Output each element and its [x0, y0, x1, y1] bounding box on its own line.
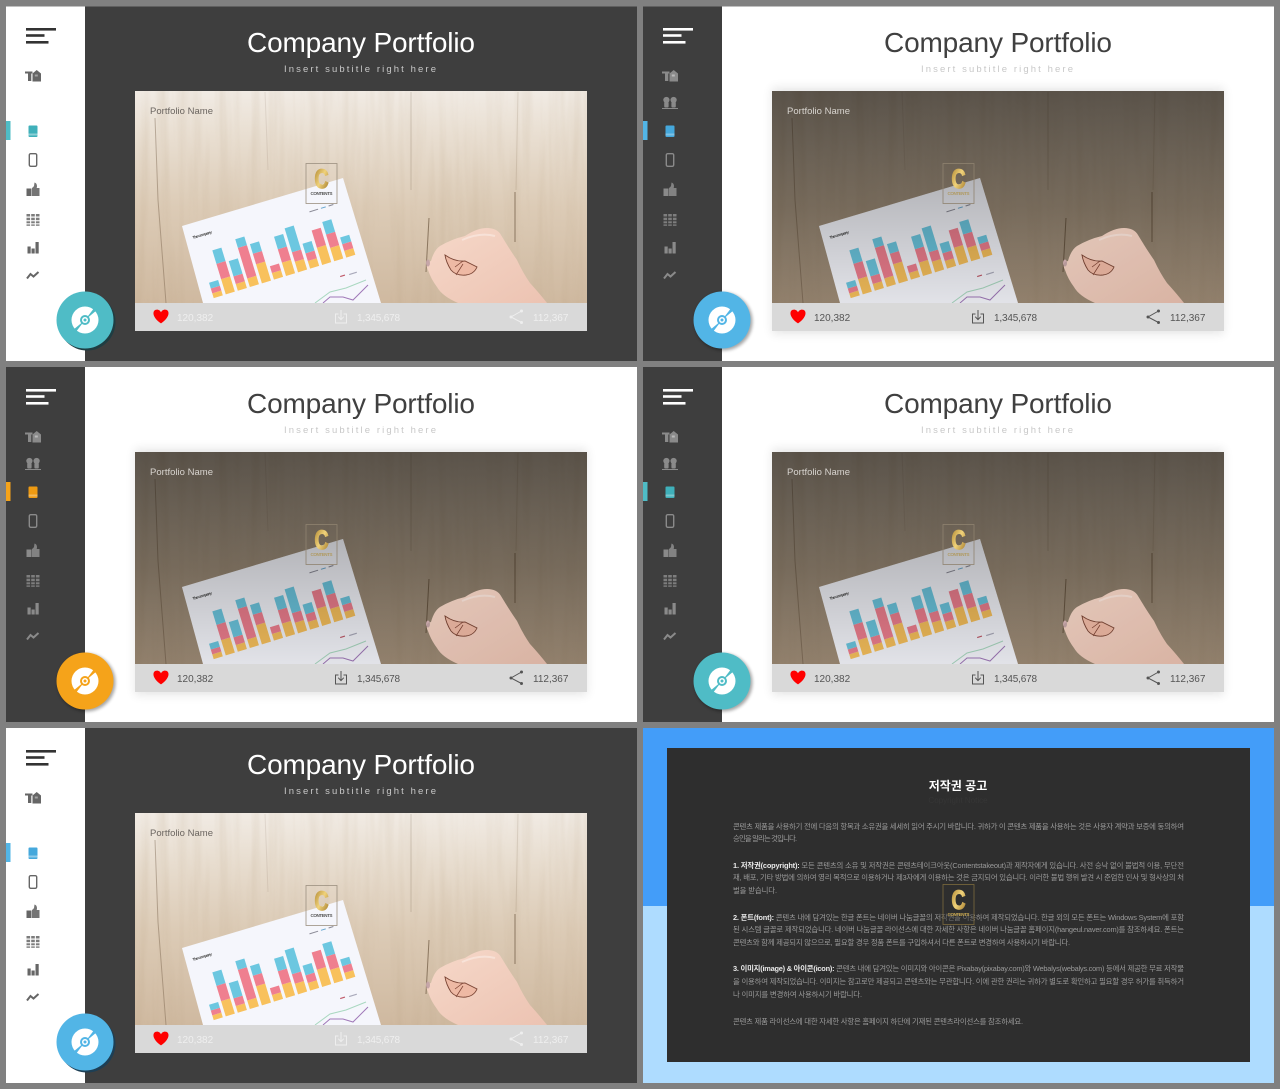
paragraph 1: copyright: 재, 배포, 기타 방법에 의하여 영리 목적으로 이용하거나 제3자에게 이용하는 것은 금지되어 있습니다. 이러한 불법 행위 발견 시 준엄한 민사 및 형사상의 처 — [733, 873, 1184, 882]
downloads stat: 1,345,678 — [994, 674, 1037, 685]
paragraph 2: font: 2. 폰트(font): 콘텐츠 내에 담겨있는 한글 폰트는 네이버 나눔글꼴의 저작권을 이용하여 제작되었습니다. 한글 외의 모든 폰트는 Windows System에 포함 — [733, 913, 1184, 922]
downloads stat — [972, 310, 1037, 324]
watermark logo: C — [314, 525, 329, 555]
subtitle: Insert subtitle right here — [284, 786, 436, 797]
panel: white main area — [722, 6, 1274, 361]
sidebar navigation icons — [25, 70, 41, 278]
active tab marker — [6, 121, 10, 140]
shares stat: 112,367 — [533, 1035, 569, 1046]
shares stat — [1147, 671, 1206, 685]
downloads stat: 1,345,678 — [357, 674, 400, 685]
title: Company Portfolio — [247, 388, 475, 419]
stats bar — [135, 1025, 587, 1053]
panel: white main area — [85, 367, 637, 722]
slide 1: dark main panel, teal accent — [6, 6, 637, 361]
slide 3: dark sidebar, white main, orange accent — [6, 367, 637, 722]
icon: disc button — [56, 1014, 116, 1072]
title: Company Portfolio — [884, 27, 1112, 58]
subtitle: Insert subtitle right here — [921, 64, 1073, 75]
downloads stat — [336, 671, 400, 685]
watermark logo: C — [314, 164, 329, 194]
photo shadow — [135, 449, 587, 695]
likes stat — [153, 1032, 214, 1046]
icon: disc button — [694, 292, 752, 350]
photo shadow — [772, 449, 1224, 695]
icon: book active — [28, 486, 38, 498]
icon: book active — [28, 126, 38, 137]
subheading: Copyright Notice — [928, 796, 988, 805]
downloads stat — [336, 310, 400, 324]
sidebar navigation icons — [25, 431, 41, 640]
watermark logo: C — [951, 885, 966, 915]
paragraph 1: copyright: 벌을 받습니다. — [733, 886, 777, 895]
subtitle: Insert subtitle right here — [921, 425, 1073, 436]
closing paragraph: 콘텐츠 제품 라이선스에 대한 자세한 사항은 홈페이지 하단에 기재된 콘텐츠라이선스를 참조하세요. — [733, 1017, 1023, 1026]
photo: dimmed wood desk, chart paper and fist — [772, 452, 1224, 664]
active tab marker — [6, 482, 10, 501]
icon: hamburger menu — [663, 28, 693, 44]
likes stat: 120,382 — [177, 1035, 214, 1046]
photo: wood desk, chart paper and fist — [135, 813, 587, 1025]
panel: dark sidebar — [643, 6, 722, 361]
active tab marker — [643, 121, 648, 140]
watermark logo: CONTENTS — [310, 191, 332, 196]
paragraph 1: copyright — [733, 861, 1184, 895]
watermark logo: CONTENTS — [948, 191, 970, 196]
stats bar — [135, 664, 587, 692]
panel: white sidebar — [6, 728, 85, 1083]
stats bar — [135, 303, 587, 331]
title: Company Portfolio — [247, 749, 475, 780]
downloads stat: 1,345,678 — [357, 1035, 400, 1046]
background: upper blue band — [643, 728, 1274, 906]
slide 4: dark sidebar, white main, teal accent — [643, 367, 1274, 722]
stats bar — [772, 303, 1224, 331]
paragraph 3: image and icon — [733, 964, 1184, 999]
portfolio name label: Portfolio Name — [787, 106, 850, 117]
slide 6: copyright notice — [643, 728, 1274, 1083]
paragraph 2: font: 된 시스템 글꼴로 제작되었습니다. 네이버 나눔글꼴 라이선스에 대한 자세한 사항은 네이버 나눔글꼴 홈페이지(hangeul.naver.com)를 참조하세요. 폰트는 — [733, 925, 1184, 934]
panel: dark sidebar — [6, 367, 85, 722]
shares stat: 112,367 — [1170, 674, 1206, 685]
intro paragraph: 승인을 알리는 것입니다. — [733, 834, 797, 843]
likes stat — [153, 310, 214, 324]
icon: book active — [666, 486, 674, 498]
likes stat: 120,382 — [177, 313, 214, 324]
shares stat — [510, 671, 569, 685]
icon: book active — [666, 126, 674, 137]
watermark logo — [306, 164, 337, 204]
heading: 저작권 공고 — [929, 778, 987, 793]
title: Company Portfolio — [884, 388, 1112, 419]
panel: dark notice — [667, 748, 1250, 1062]
watermark logo: CONTENTS — [948, 912, 970, 917]
paragraph 3: image and icon: 나 이미지를 변경하여 사용하시기 바랍니다. — [733, 990, 862, 999]
downloads stat: 1,345,678 — [357, 313, 400, 324]
watermark logo: C — [951, 525, 966, 555]
photo: wood desk, chart paper and fist — [135, 91, 587, 303]
portfolio name label: Portfolio Name — [787, 467, 850, 478]
watermark logo — [943, 164, 974, 204]
portfolio name label: Portfolio Name — [150, 106, 213, 117]
sidebar navigation icons — [662, 431, 678, 640]
icon: disc button — [56, 652, 116, 712]
shares stat: 112,367 — [533, 674, 569, 685]
paragraph 3: image and icon: 3. 이미지(image) & 아이콘(icon): 콘텐츠 내에 담겨있는 이미지와 아이콘은 Pixabay(pixabay.com)와 Webalys(webalys.com) 등에서 제공한 무료 저작물 — [733, 964, 1184, 973]
photo shadow — [772, 88, 1224, 334]
panel: white main area — [722, 367, 1274, 722]
paragraph 3: image and icon: 을 이용하여 제작되었습니다. 이미지는 참고로만 제공되고 콘텐츠와는 무관합니다. 이에 관한 권리는 귀하가 별도로 확인하고 필요할 경우 허가를 취득하거 — [733, 977, 1184, 986]
slide 2: dark sidebar, white main, blue accent — [643, 6, 1274, 361]
shares stat — [510, 1032, 569, 1046]
stats bar — [772, 664, 1224, 692]
active tab marker — [6, 843, 10, 862]
photo: dimmed wood desk, chart paper and fist — [135, 452, 587, 664]
watermark logo: CONTENTS — [310, 552, 332, 557]
icon: hamburger menu — [26, 750, 56, 766]
panel: dark sidebar — [643, 367, 722, 722]
icon: book active — [28, 848, 38, 859]
sidebar navigation icons — [25, 792, 41, 1000]
active tab marker — [643, 482, 648, 501]
shares stat — [1147, 310, 1206, 324]
portfolio name label: Portfolio Name — [150, 828, 213, 839]
likes stat — [790, 310, 851, 324]
likes stat: 120,382 — [814, 313, 851, 324]
watermark logo — [943, 884, 974, 924]
panel: dark main area — [85, 728, 637, 1083]
title: Company Portfolio — [247, 27, 475, 58]
paragraph 1: copyright: 1. 저작권(copyright): 모든 콘텐츠의 소유 및 저작권은 콘텐츠테이크아웃(Contentstakeout)과 제작자에게 있습니다. 사전 승낙 없이 불법적 이용, 무단전 — [733, 861, 1184, 870]
likes stat — [790, 671, 851, 685]
watermark logo: CONTENTS — [948, 552, 970, 557]
shares stat: 112,367 — [533, 313, 569, 324]
slide 5: dark main panel, blue accent — [6, 728, 637, 1083]
icon: disc button — [694, 652, 752, 712]
background: lower light blue band — [643, 906, 1274, 1083]
panel: white sidebar — [6, 6, 85, 361]
shares stat: 112,367 — [1170, 313, 1206, 324]
intro paragraph — [733, 822, 1184, 843]
icon: disc button — [56, 292, 116, 350]
icon: hamburger menu — [26, 28, 56, 44]
watermark logo: CONTENTS — [310, 913, 332, 918]
photo: dimmed wood desk, chart paper and fist — [772, 91, 1224, 303]
watermark logo: C — [314, 886, 329, 916]
downloads stat: 1,345,678 — [994, 313, 1037, 324]
portfolio name label: Portfolio Name — [150, 467, 213, 478]
intro paragraph: 콘텐츠 제품을 사용하기 전에 다음의 항목과 소유권을 세세히 읽어 주시기 바랍니다. 귀하가 이 콘텐츠 제품을 사용하는 것은 사용자 계약과 보증에 동의하여 — [733, 822, 1184, 831]
icon: hamburger menu — [663, 389, 693, 405]
watermark logo: C — [951, 164, 966, 194]
paragraph 2: font: 콘텐츠와 함께 제공되지 않으므로, 필요할 경우 정품 폰트를 구입하셔서 다른 폰트로 변경하여 사용하시기 바랍니다. — [733, 938, 1070, 947]
panel: dark main area — [85, 6, 637, 361]
watermark logo — [306, 886, 337, 926]
likes stat: 120,382 — [177, 674, 214, 685]
downloads stat — [336, 1032, 400, 1046]
sidebar navigation icons — [662, 70, 678, 278]
paragraph 2: font — [733, 913, 1184, 947]
watermark logo — [306, 524, 337, 564]
subtitle: Insert subtitle right here — [284, 64, 436, 75]
shares stat — [510, 310, 569, 324]
likes stat: 120,382 — [814, 674, 851, 685]
likes stat — [153, 671, 214, 685]
watermark logo — [943, 524, 974, 564]
subtitle: Insert subtitle right here — [284, 425, 436, 436]
icon: hamburger menu — [26, 389, 56, 405]
downloads stat — [972, 671, 1037, 685]
